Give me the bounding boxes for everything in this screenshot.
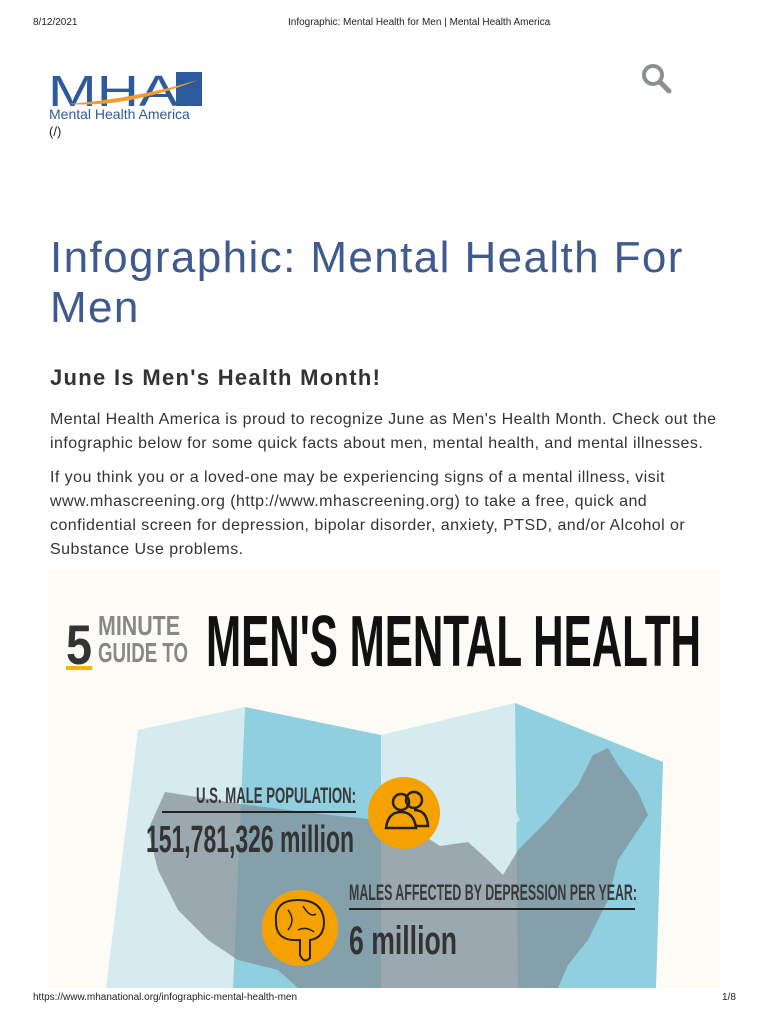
logo: MHA [48, 68, 179, 116]
stat: male population: U.S. MALE POPULATION: [196, 783, 356, 808]
logo [48, 68, 202, 139]
print footer: https://www.mhanational.org/infographic-mental-health-men [33, 992, 297, 1003]
stat: male population: 151,781,326 million [146, 819, 354, 861]
icon: people [368, 777, 440, 849]
title: Infographic: Mental Health For [50, 233, 684, 282]
logo: (/) [49, 124, 61, 139]
map panels [106, 703, 663, 988]
stat: depression: 6 million [349, 919, 457, 963]
intro text: confidential screen for depression, bipolar disorder, anxiety, PTSD, and/or Alcohol or [50, 517, 685, 534]
stat: male population [146, 783, 356, 861]
logo: Mental Health America [49, 106, 190, 122]
intro text [50, 411, 717, 558]
intro text: If you think you or a loved-one may be experiencing signs of a mental illness, visit [50, 469, 665, 486]
icon: search [642, 64, 672, 94]
intro text: www.mhascreening.org (http://www.mhascreening.org) to take a free, quick and [50, 493, 647, 510]
print header: Infographic: Mental Health for Men | Mental Health America [288, 17, 550, 28]
print header: 8/12/2021 [33, 17, 78, 28]
print footer [33, 992, 736, 1003]
infographic header: MINUTE [98, 610, 180, 641]
intro text: Mental Health America is proud to recognize June as Men's Health Month. Check out the infographic below for some quick facts about men, mental health, and mental illnesses. [50, 411, 717, 452]
print header [33, 17, 550, 28]
subheading: June Is Men's Health Month! [50, 365, 381, 390]
stat: depression [349, 880, 637, 963]
title [50, 233, 684, 332]
infographic header: 5 [66, 613, 92, 676]
infographic [48, 570, 720, 988]
icon: brain [262, 890, 338, 966]
map: US silhouette [148, 748, 648, 988]
infographic header: GUIDE TO [98, 637, 188, 668]
title: Men [50, 283, 140, 332]
intro text: Substance Use problems. [50, 541, 244, 558]
print footer: 1/8 [722, 992, 736, 1003]
